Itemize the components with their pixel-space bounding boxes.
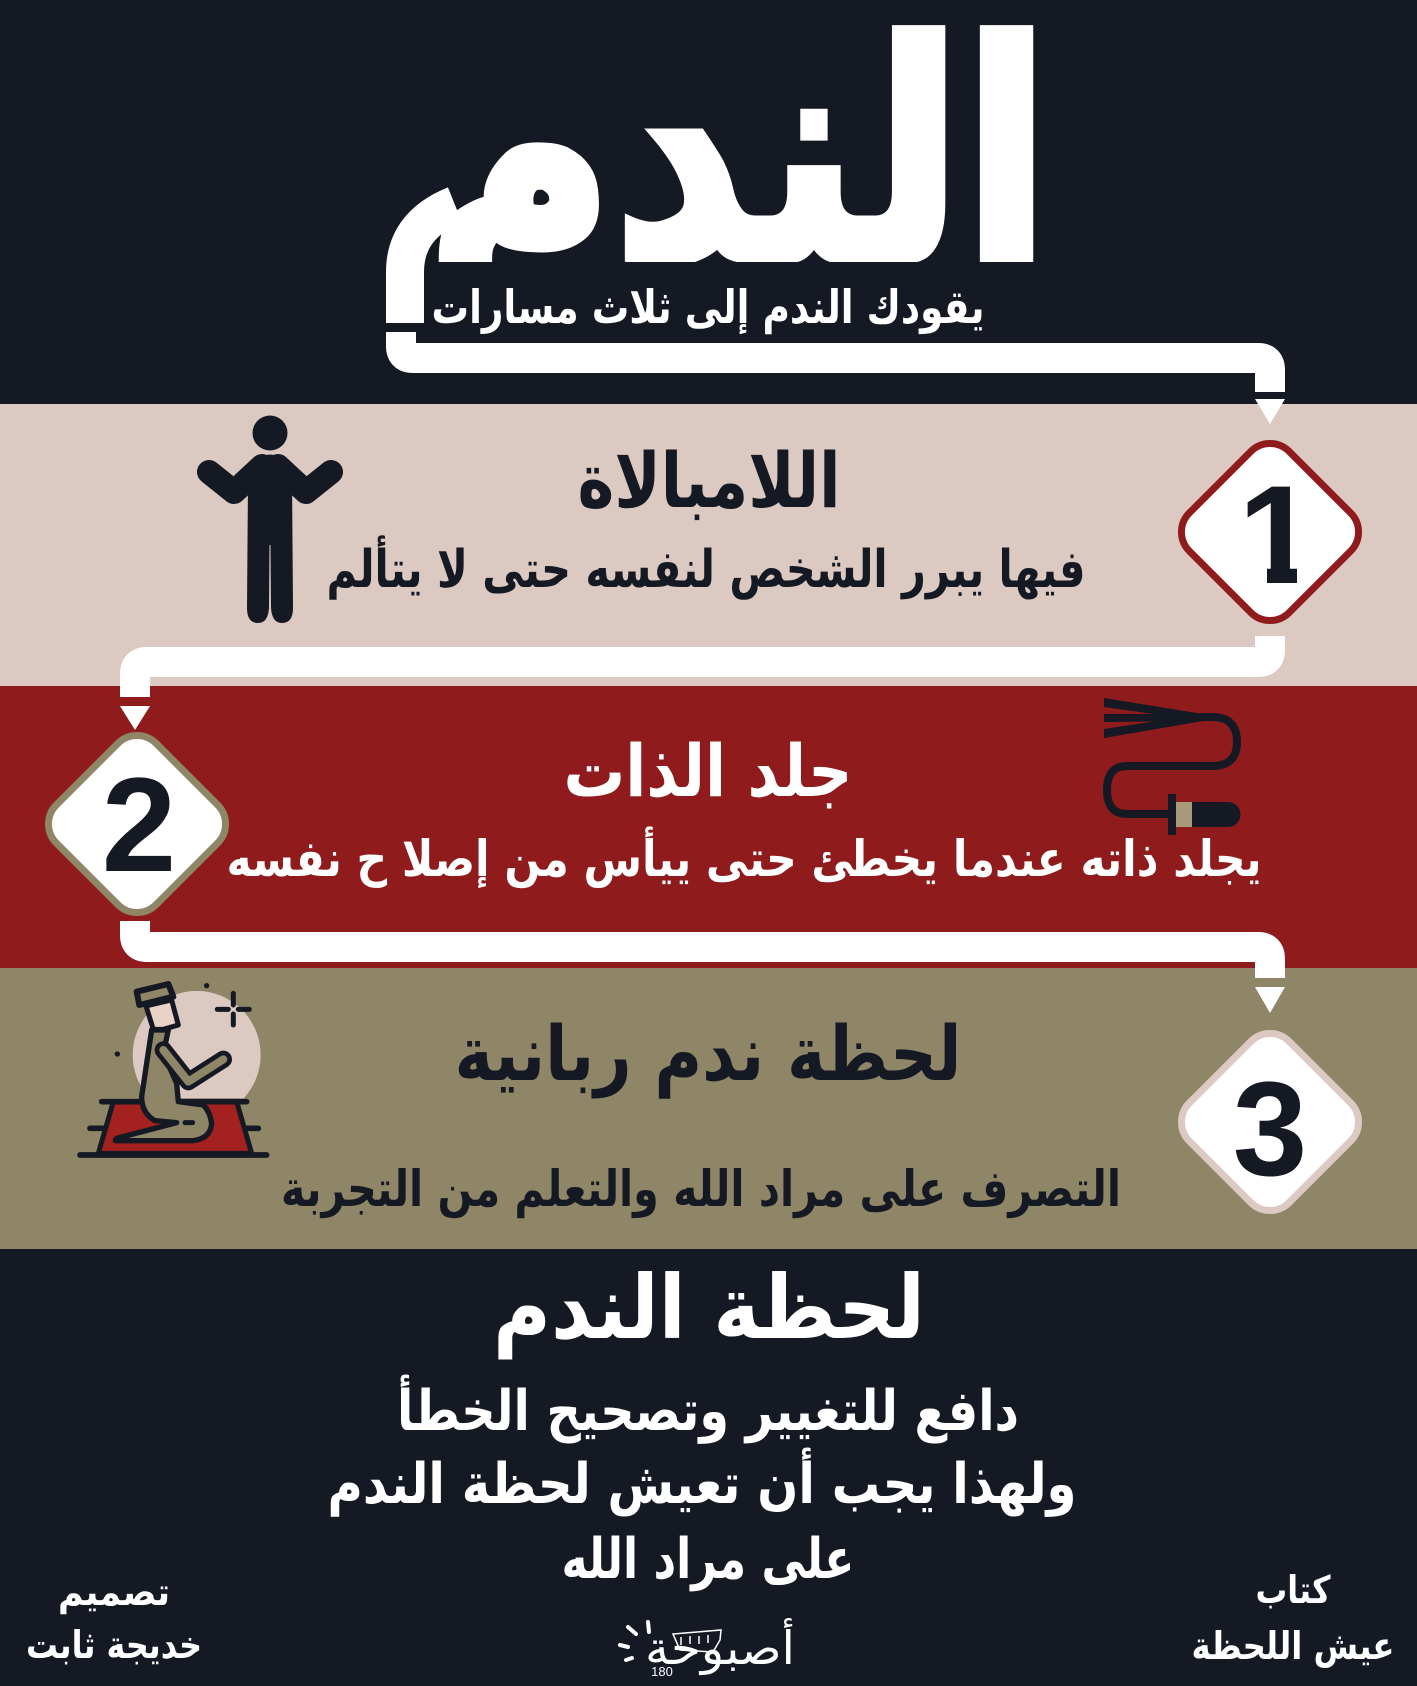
heading: self-flagellation: جلد الذات: [564, 729, 852, 813]
panel: path 1 indifference: [0, 404, 1417, 686]
text: closing message line 2: ولهذا يجب أن تعيش لحظة الندم: [328, 1447, 1076, 1517]
badge: number 1: 1: [1238, 456, 1316, 613]
credit: designer: خديجة ثابت: [26, 1623, 202, 1667]
panel: top dark background: [0, 0, 1417, 404]
arrow: pipe from step 1 to step 2: [120, 636, 1270, 730]
credit: designer: تصميم: [58, 1570, 170, 1615]
heading: the moment of regret: لحظة الندم: [493, 1256, 925, 1360]
arrow: pipe from step 2 to step 3: [135, 921, 1285, 1013]
text: self-flagellation description: يجلد ذاته عندما يخطئ حتى ييأس من إصلا ح نفسه: [226, 826, 1262, 889]
badge: number 3: 3: [1233, 1055, 1307, 1204]
icon: whip: [1104, 698, 1240, 835]
badge: number 3: [1170, 1022, 1370, 1222]
subtitle: يقودك الندم إلى ثلاث مسارات: [432, 280, 984, 335]
heading: indifference: اللامبالاة: [578, 436, 840, 525]
text: indifference description: فيها يبرر الشخص لنفسه حتى لا يتألم: [326, 535, 1086, 600]
logo: Osbouha 180: 180: [651, 1664, 673, 1679]
text: divine regret description: التصرف على مراد الله والتعلم من التجربة: [281, 1160, 1121, 1219]
icon: shrugging person: [209, 416, 331, 623]
credit: book: كتاب: [1256, 1568, 1331, 1612]
logo: Osbouha 180: أصبوحة: [645, 1618, 795, 1676]
panel: path 3 divine regret: [0, 968, 1417, 1249]
icon: person praying on a rug: [80, 983, 267, 1155]
heading: divine regret: لحظة ندم ربانية: [454, 1009, 962, 1099]
panel: bottom dark background: [0, 1249, 1417, 1686]
panel: path 2 self-flagellation: [0, 686, 1417, 968]
text: closing message line 1: دافع للتغيير وتصحيح الخطأ: [397, 1374, 1019, 1444]
credit: book: [1192, 1568, 1394, 1668]
badge: number 2: [37, 724, 237, 924]
text: closing message line 3: على مراد الله: [562, 1527, 854, 1592]
badge: number 2: 2: [102, 751, 176, 900]
arrow: pipe from title to step 1: [401, 332, 1285, 424]
badge: number 1: [1178, 440, 1362, 624]
credit: designer: [26, 1570, 202, 1667]
